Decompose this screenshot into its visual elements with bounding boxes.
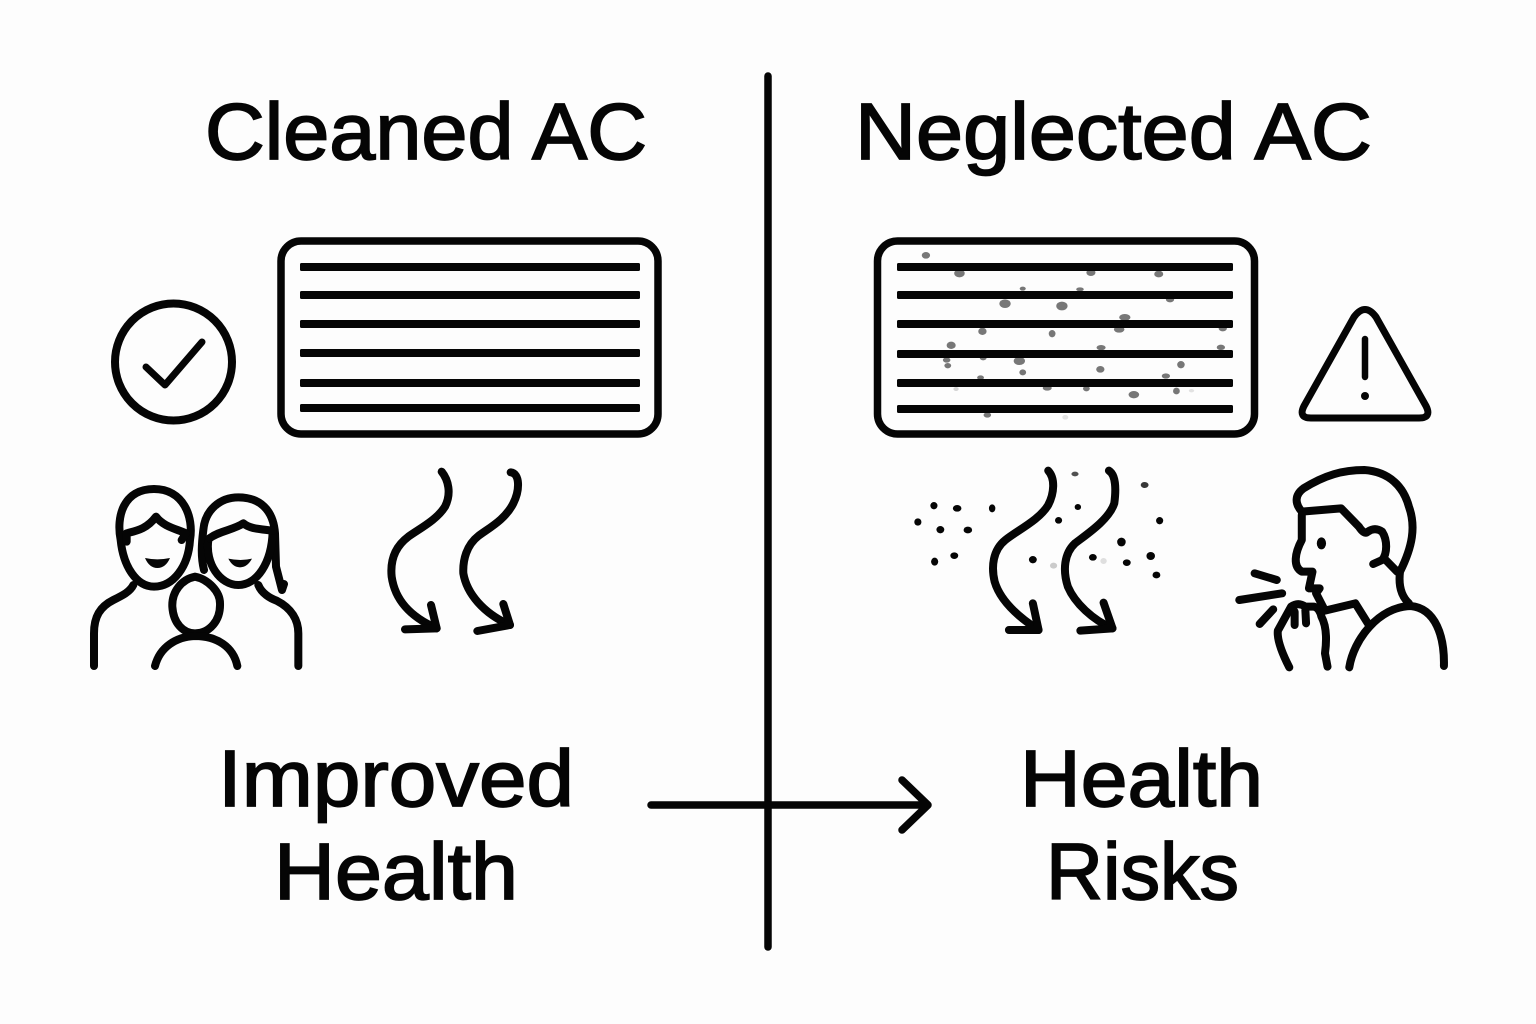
icon: dirty airflow arrows — [993, 471, 1115, 631]
icon: check mark in circle — [115, 304, 232, 420]
icon: clean AC vent — [281, 241, 658, 434]
icon: dirty AC vent with dust — [878, 241, 1254, 434]
arrow: from improved health to health risks — [651, 780, 928, 830]
title: Cleaned AC: Cleaned AC — [205, 87, 647, 176]
icon: warning triangle — [1302, 310, 1428, 418]
icon: clean airflow arrows — [391, 472, 518, 631]
label: Improved Health: Improved — [218, 734, 574, 823]
label: Improved Health — [218, 734, 574, 916]
label: Improved Health: Health — [274, 827, 518, 916]
particles: airborne dust — [914, 472, 1163, 578]
icon: coughing man — [1239, 470, 1444, 667]
title: Neglected AC: Neglected AC — [855, 87, 1372, 176]
dust specks on vent — [922, 252, 1227, 420]
label: Health Risks: Risks — [1046, 827, 1239, 916]
label: Health Risks: Health — [1020, 734, 1263, 823]
icon: family of three — [94, 489, 298, 666]
divider: vertical line — [764, 76, 772, 947]
label: Health Risks — [1020, 734, 1263, 916]
